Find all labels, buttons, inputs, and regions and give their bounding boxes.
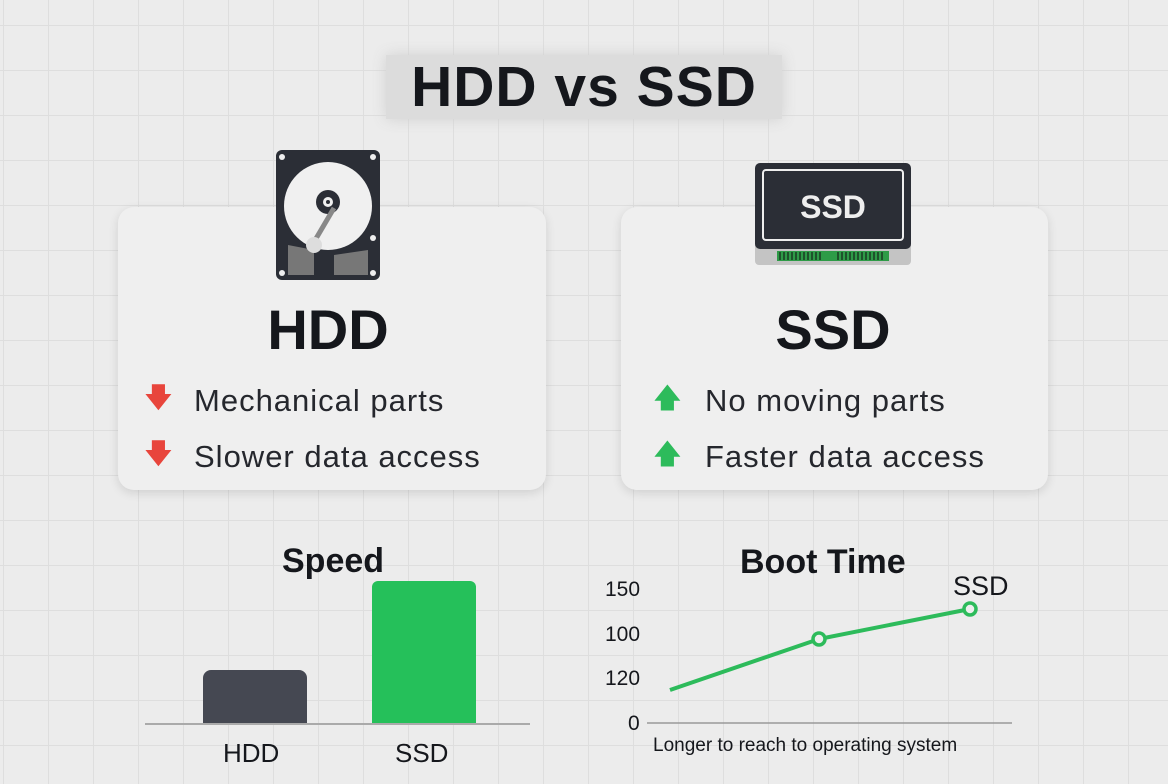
line chart: boot time: 0	[628, 712, 640, 735]
line chart: boot time: Boot Time	[740, 543, 906, 581]
list SSD: Faster data access	[705, 439, 985, 474]
bar SSD	[372, 581, 476, 724]
bar chart: speed	[145, 542, 530, 768]
list SSD: 🡅	[653, 438, 683, 469]
icon: hard drive	[276, 150, 380, 280]
line chart: boot time	[605, 543, 1012, 756]
line chart: boot time: 150	[605, 578, 640, 601]
panel: HDD	[118, 207, 546, 490]
list HDD: 🡇	[144, 382, 174, 413]
list SSD	[653, 382, 985, 474]
bar chart: speed: SSD	[395, 738, 448, 768]
list HDD	[144, 382, 481, 474]
chart title: Speed	[282, 542, 384, 580]
list HDD: Slower data access	[194, 439, 481, 474]
line chart: boot time: 120	[605, 667, 640, 690]
list SSD: 🡅	[653, 382, 683, 413]
bar HDD	[203, 670, 307, 724]
icon: SSD drive: SSD	[800, 189, 866, 225]
heading HDD: HDD	[267, 298, 389, 361]
labels: HDD	[223, 738, 279, 768]
title: HDD vs SSD	[411, 55, 757, 119]
panel: SSD	[621, 207, 1048, 490]
line chart: boot time: 100	[605, 623, 640, 646]
list HDD: Mechanical parts	[194, 383, 444, 418]
line chart: boot time: SSD	[953, 571, 1009, 601]
list SSD: No moving parts	[705, 383, 946, 418]
list HDD: 🡇	[144, 438, 174, 469]
icon: SSD drive	[755, 163, 911, 265]
heading SSD: SSD	[775, 298, 891, 361]
line chart: boot time: Longer to reach to operating system	[653, 735, 957, 756]
